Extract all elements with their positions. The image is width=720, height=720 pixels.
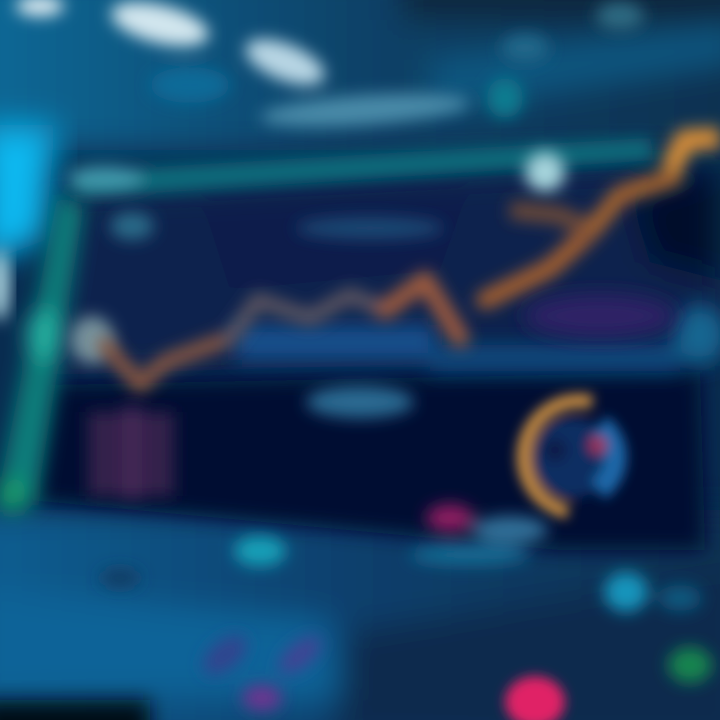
orange line chart (105, 138, 720, 385)
bottom left dark corner (0, 700, 150, 720)
green edge strip (0, 195, 84, 513)
panel labels (110, 212, 444, 418)
left white glow (0, 249, 9, 321)
donut chart (524, 401, 616, 512)
green button (668, 647, 712, 683)
top white highlights (16, 0, 644, 132)
bottom purple marks (196, 628, 328, 711)
left cyan screen (0, 125, 55, 265)
bottom accents (100, 504, 702, 612)
bottom band (0, 510, 720, 720)
purple bars chart (88, 405, 174, 500)
teal header bar (67, 138, 655, 198)
white marker (70, 152, 565, 364)
blue bars under the line (235, 305, 720, 371)
lower chart panel (30, 372, 705, 550)
purple hump chart (524, 294, 676, 338)
pink button (505, 676, 565, 720)
line left segment (105, 138, 720, 385)
top band (0, 0, 720, 150)
upper chart panel (50, 165, 720, 375)
